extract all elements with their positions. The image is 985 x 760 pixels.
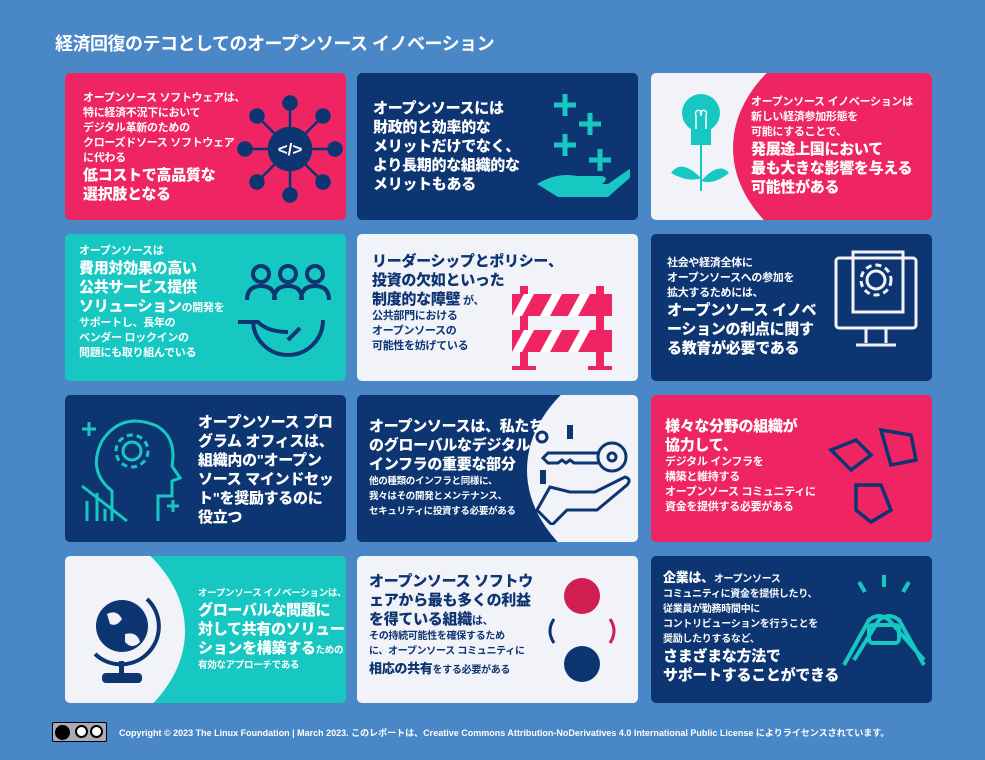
footer: license (52, 722, 889, 742)
icon: people hand (238, 264, 331, 357)
text: copyright: Copyright © 2023 The Linux Foundation | March 2023. このレポートは、Creative Commons Attribution-NoDerivatives 4.0 International Public License によりライセンスされています。 (119, 728, 889, 738)
text: program office: 役立つ (198, 509, 242, 526)
text: education: オープンソースへの参加を (667, 272, 794, 284)
text: low cost: オープンソース ソフトウェアは、 (83, 92, 245, 104)
text: public services: 公共サービス提供 (79, 279, 197, 296)
panel: long-term benefits (357, 73, 638, 220)
text: global: 対して共有のソリュー (198, 621, 345, 638)
text: share back: 相応の共有をする必要がある (369, 661, 510, 676)
text: infrastructure (369, 418, 544, 517)
text: low cost (83, 92, 245, 203)
icon: hands (828, 428, 918, 524)
text: infrastructure: インフラの重要な部分 (369, 456, 516, 473)
icon: plus hand (537, 94, 630, 197)
text: share back: を得ている組織は、 (369, 611, 493, 628)
text: developing: 可能にすることで、 (751, 126, 847, 138)
text: program office: グラム オフィスは、 (198, 433, 333, 450)
text: share back: オープンソース ソフトウ (369, 573, 533, 590)
text: share back: ェアから最も多くの利益 (369, 592, 531, 609)
icon: key hand (536, 425, 631, 525)
text: low cost: に代わる (83, 152, 126, 164)
text: developing: 最も大きな影響を与える (751, 160, 912, 177)
text: barriers: 可能性を妨げている (372, 340, 468, 352)
text: education: ーションの利点に関す (667, 321, 814, 338)
title: 経済回復のテコとしてのオープンソース イノベーション (55, 34, 494, 54)
text: barriers (372, 252, 563, 352)
icon: cc badge (52, 722, 107, 742)
text: public services: サポートし、長年の (79, 317, 175, 329)
text: long-term: 財政的と効率的な (373, 119, 491, 136)
text: support: さまざまな方法で (663, 648, 781, 665)
panel: global problems (65, 556, 346, 703)
text: barriers: リーダーシップとポリシー、 (372, 253, 563, 270)
text: share back: その持続可能性を確保するため (369, 631, 505, 642)
text: funding: オープンソース コミュニティに (665, 486, 816, 498)
text: public services (79, 244, 224, 359)
text: global: グローバルな問題に (198, 602, 330, 619)
panel: education (651, 234, 932, 381)
text: long-term: より長期的な組織的な (373, 157, 520, 174)
text: program office (198, 414, 333, 526)
text: funding: 協力して、 (665, 437, 737, 454)
text: public services: ソリューションの開発を (79, 298, 224, 315)
panel: barriers (357, 234, 638, 381)
text: global: オープンソース イノベーションは、 (198, 588, 346, 599)
panel: developing countries (651, 73, 932, 220)
text: support: コミュニティに資金を提供したり、 (663, 589, 817, 600)
text: funding: 様々な分野の組織が (665, 418, 797, 435)
text: education (667, 256, 816, 357)
text: barriers: オープンソースの (372, 325, 456, 337)
text: global: ションを構築するための (198, 640, 343, 657)
text: support: サポートすることができる (663, 667, 839, 684)
text: long-term (373, 100, 520, 193)
text: developing: 可能性がある (751, 179, 839, 196)
text: share back: に、オープンソース コミュニティに (369, 646, 525, 657)
text: developing: オープンソース イノベーションは (751, 96, 913, 108)
text: share back (369, 573, 533, 676)
text: infrastructure: セキュリティに投資する必要がある (369, 506, 516, 517)
text: long-term: メリットだけでなく、 (373, 138, 520, 155)
text: program office: 組織内の"オープン (198, 452, 322, 469)
text: support: 奨励したりするなど、 (663, 634, 760, 645)
icon: bulb plant (671, 94, 729, 191)
text: low cost: クローズドソース ソフトウェア (83, 137, 234, 149)
text: support: 企業は、オープンソース (663, 570, 781, 585)
text: support: コントリビューションを行うことを (663, 619, 818, 630)
icon: cycle circles (548, 578, 616, 682)
text: developing: 発展途上国において (751, 141, 883, 158)
text: public services: 費用対効果の高い (79, 260, 197, 277)
panel: company support (651, 556, 932, 703)
text: funding: 資金を提供する必要がある (665, 501, 793, 513)
text: education: る教育が必要である (667, 340, 799, 357)
text: education: 拡大するためには、 (667, 287, 763, 299)
text: infrastructure: のグローバルなデジタル (369, 437, 530, 454)
text: support: 従業員が勤務時間中に (663, 604, 760, 615)
text: low cost: デジタル革新のための (83, 122, 190, 134)
text: program office: オープンソース プロ (198, 414, 333, 431)
text: infrastructure: 我々はその開発とメンテナンス、 (369, 491, 507, 502)
text: low cost: 特に経済不況下において (83, 107, 200, 119)
text: global: 有効なアプローチである (198, 660, 299, 671)
panel: low cost (65, 73, 346, 220)
text: support (663, 570, 839, 684)
text: program office: ト"を奨励するのに (198, 490, 322, 507)
text: infrastructure: オープンソースは、私たち (369, 418, 544, 435)
icon: handshake (842, 575, 926, 666)
text: barriers: 制度的な障壁 が、 (372, 291, 484, 308)
text: program office: ソース マインドセッ (198, 471, 333, 488)
text: public services: ベンダー ロックインの (79, 332, 189, 344)
text: long-term: メリットもある (373, 176, 476, 193)
text: developing: 新しい経済参加形態を (751, 111, 858, 123)
icon: head gear (81, 420, 182, 522)
panel: share back (357, 556, 638, 703)
text: low cost: 選択肢となる (83, 186, 171, 203)
text: infrastructure: 他の種類のインフラと同様に、 (369, 476, 497, 487)
text: funding: 構築と維持する (665, 471, 740, 483)
icon: barrier (512, 286, 612, 370)
text: education: オープンソース イノベ (667, 302, 816, 319)
text: low cost: 低コストで高品質な (83, 167, 215, 184)
text: education: 社会や経済全体に (667, 257, 753, 269)
text: funding: デジタル インフラを (665, 456, 764, 468)
text: long-term: オープンソースには (373, 100, 504, 117)
panel: digital infrastructure (357, 395, 638, 542)
text: barriers: 投資の欠如といった (372, 272, 504, 289)
panel: funding community (651, 395, 932, 542)
icon: globe (94, 598, 161, 683)
text: public services: オープンソースは (79, 245, 163, 257)
text: global (198, 588, 346, 671)
panel: public services (65, 234, 346, 381)
panel: program office (65, 395, 346, 542)
icon: code network: </> (278, 140, 302, 159)
text: public services: 問題にも取り組んでいる (79, 347, 196, 359)
icon: book monitor (834, 250, 918, 346)
icon: code network (237, 95, 343, 203)
text: funding (665, 418, 816, 513)
text: barriers: 公共部門における (372, 310, 458, 322)
text: developing (751, 96, 913, 196)
